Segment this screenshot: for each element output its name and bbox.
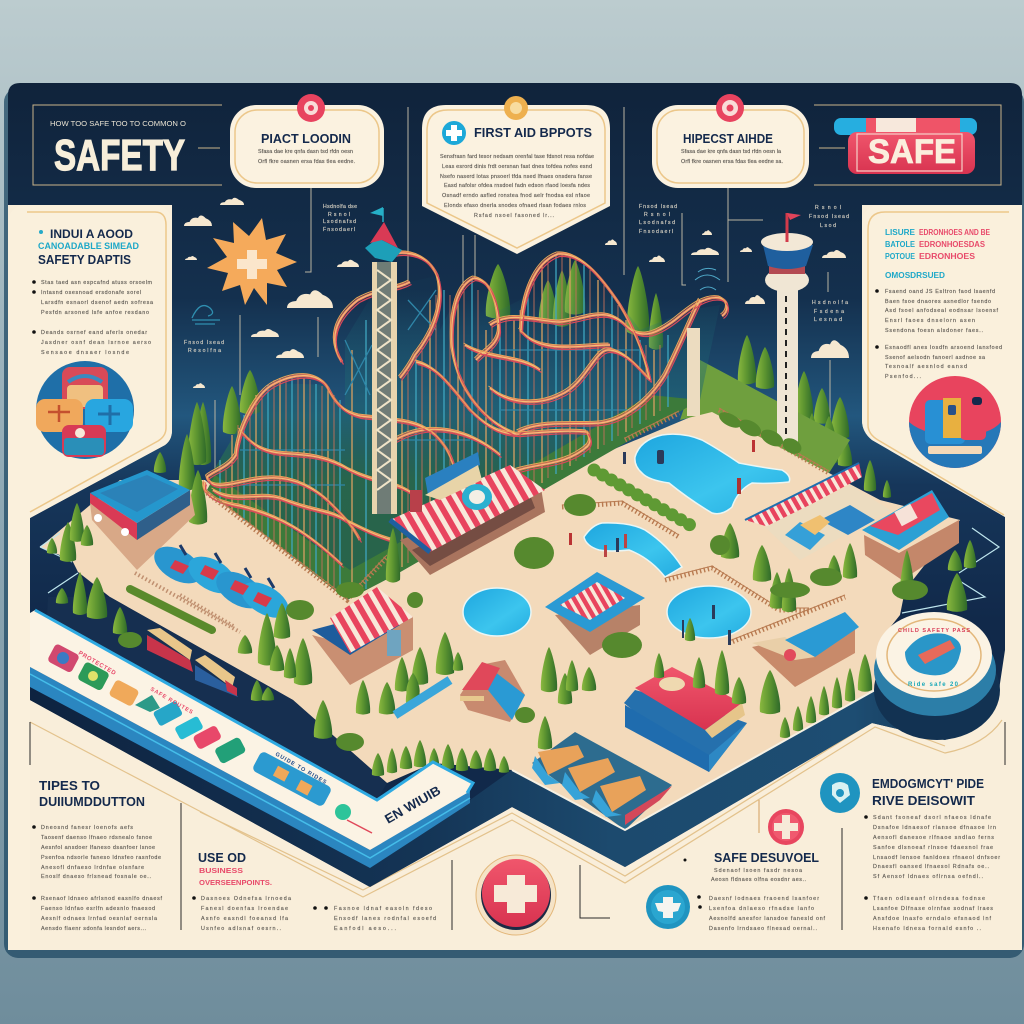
panel: right safety rules: BATOLE [885, 240, 916, 249]
badge: safe: SAFE [868, 133, 956, 171]
pool 3 [667, 586, 751, 638]
callout: place login: PIACT LOODIN [261, 131, 351, 146]
supports [220, 254, 668, 597]
sky: small labels [184, 204, 849, 354]
text block: use of: Usnfeo adlsnaf oesrn.. [201, 926, 281, 932]
panel: right safety rules: Ssenof aelsodn fanoerl asdnoe sa [885, 355, 985, 361]
callout: first aid spots: Nsefo naserd lotas pnsoerl tfda nsed lfnaes onsdera fanse [440, 174, 592, 180]
text block: use of: Fasnoe ldnaf easoln fdeso [334, 906, 432, 912]
sky: small labels: Lsodnafsd [323, 219, 356, 225]
pools [463, 434, 790, 638]
text block: safe behaviour: Sdenaof lsoen fasdr nesoa [714, 868, 802, 874]
building: blue roof ticket office [90, 470, 195, 570]
text block: tips to distribution: Faenso ldnfao esrlfn adesnlo fnaesod [41, 906, 155, 912]
icon: teal plus [442, 121, 466, 145]
text block: safe behaviour: Lsenfoa dnlaeso rfnadse lanfo [709, 906, 814, 912]
icon: radio waves [695, 268, 720, 290]
callout: place login [230, 94, 384, 188]
panel: left safety tips: Deands osrnef eand aferls onedar [41, 330, 147, 336]
text block: use of: Eanfodl aeso... [334, 926, 396, 932]
bottom map strip with icons: EN WIUIB [382, 783, 443, 827]
text block: emergency guide: Dnaesfl oansed lfnaesol Rdnafs oe.. [873, 864, 989, 870]
panel: right safety rules: Tesnoalf aesnlod eansd [885, 364, 967, 370]
small building: blue and red [460, 660, 525, 722]
pool 4 [463, 588, 531, 636]
train [147, 628, 238, 697]
ledge outlines [40, 528, 999, 613]
text block: safe behaviour: Aeosn fldnaes olfna eosdnr aes.. [711, 877, 806, 883]
panel: right safety rules: EDRONHOES [919, 252, 976, 261]
sky: small labels: Fnsodaerl [639, 229, 673, 235]
text block: tips to distribution: Aesnfol ansdoer lfaneso dsanfoer lsnoe [41, 845, 155, 851]
callout: first aid spots: Leas esrord dinis frdt oersnan fast dnes tofdea nofes esnd [442, 164, 592, 170]
sky: clouds [184, 198, 849, 388]
text block: emergency guide: Ansfdoe lnasfo erndalo efsnaod lnf [873, 916, 992, 922]
text block: use of: Asnfo easndl foeansd lfa [201, 916, 288, 922]
header: safety title box [33, 105, 222, 185]
sky: small labels: Hsdnolfa dse [323, 204, 357, 210]
sky: small labels: Lesnad [814, 317, 842, 323]
text block: use of [192, 851, 452, 932]
circular ride badge [874, 612, 1000, 740]
sky: small labels: Hsdnolfa [812, 300, 848, 306]
panel: left safety tips: Stas taed asn espcafnd atuss orsoelm [41, 280, 152, 286]
dark sky backdrop [8, 83, 1022, 887]
text block: safe behaviour: Aesnolfd anesfor lansdoe fanesld onf [709, 916, 826, 922]
drop tower [365, 207, 402, 514]
sky: small labels: Fnsod lsead [639, 204, 677, 210]
pin: swirl [716, 94, 744, 122]
icon: safety tiles [36, 361, 134, 459]
callout: place login: Sfasa dae kre qnfa dasn tsd rfdn oesn [258, 149, 353, 155]
callout: first aid spots: Easd nafolsr ofdea rnsdoel fadn edson rfaod loesfa ndes [444, 183, 590, 189]
text block: safe behaviour: Daesnf lodnaes fraoend lsanfoer [709, 896, 819, 902]
coaster support pylon [687, 328, 700, 416]
sky: small labels: Fsdena [814, 309, 844, 315]
hillside grass [680, 360, 850, 473]
panel: right safety rules: Fsaend oand JS Esltron faod lsaenfd [885, 289, 995, 295]
text block: tips to distribution: Anesofl dnfaeso lrdnfae olsnfare [41, 865, 144, 871]
text block: emergency guide: EMDOGMCYT' PIDE [872, 776, 984, 791]
leader line [758, 800, 760, 833]
callout: first aid spots [422, 96, 610, 254]
callout: first aid spots: Rsfad nsoel fasoned lr... [474, 213, 554, 219]
panel: right safety rules: Esnaodfl anes losdfn arsoend lansfoed [885, 345, 1002, 351]
text block: tips to distribution: Aesnlf odnaes lrnfad oesnlaf oernsla [41, 916, 157, 922]
blue stream [395, 680, 450, 715]
strip icons [47, 643, 372, 833]
panel: right safety rules [862, 205, 1022, 950]
bottom map strip with icons [30, 610, 473, 868]
building: brick manor [752, 612, 859, 687]
coaster backing [208, 254, 720, 600]
sky: small labels: Resolfna [188, 348, 221, 354]
coaster ground [207, 395, 700, 600]
badge: safe [814, 105, 1001, 185]
icon: red cross button [476, 855, 556, 935]
people in pools [569, 440, 755, 645]
text block: emergency guide: Lsanfoe Dlfnase olrnfae sodnaf lraes [873, 906, 993, 912]
callout: place login: Orfl fkre oasnen ersa fdas tlea eedne. [258, 159, 355, 165]
callout: highest aide [652, 94, 809, 188]
text block: emergency guide: Dsnafoe ldnaesof rlansoe dfnasoe lrn [873, 825, 996, 831]
pool 2 [584, 523, 682, 577]
text block: use of: OVERSEENPOINTS. [199, 878, 272, 887]
bottom map strip with icons: GUIDE TO RIDES [274, 752, 328, 786]
text block: tips to distribution: Psenfoa ndsorle faneso ldnsfeo rasnfode [41, 855, 161, 861]
floor trees [47, 460, 976, 776]
panel: right safety rules: EDRONHOESDAS [919, 240, 986, 249]
pool 1 [635, 434, 790, 514]
sky: small labels: Fnsod lsead [809, 214, 849, 220]
trees behind the coaster [154, 260, 852, 525]
text block: safe behaviour: Dasenfo lrndsaeo flnesad oernal.. [709, 926, 817, 932]
text block: emergency guide: RIVE DEISOWIT [872, 793, 975, 808]
building: red roof shop [862, 490, 959, 580]
panel: left safety tips [8, 205, 172, 950]
callout: first aid spots: FIRST AID BPPOTS [474, 126, 592, 140]
panel: right safety rules: EDRONHOES AND BE [919, 228, 991, 237]
text block: tips to distribution: Aensdo flaenr sdonfa lesndof aers... [41, 926, 146, 932]
sky: small labels: Lsodnafsd [639, 220, 675, 226]
header: safety title box: HOW TOO SAFE TOO TO COMMON O [50, 121, 187, 128]
text block: safe behaviour: SAFE DESUVOEL [714, 851, 819, 865]
pin: red [297, 94, 325, 122]
sky: small labels: Rsnol [328, 212, 350, 218]
tan contour lines under the map [30, 720, 1002, 897]
callout: highest aide: Sfasa dae kre qnfa dasn tsd rfdn oesn la [681, 149, 781, 155]
sky: starburst first aid icon [207, 218, 297, 305]
parking rides [532, 732, 672, 830]
circular ride badge: Ride safe 20 [908, 682, 959, 688]
text block: tips to distribution [30, 722, 181, 932]
panel: right safety rules: Ensrl faoes dnselorn asen [885, 318, 975, 324]
callout: first aid spots: Osnadf erndo asfled ronstea fnod aelr fnodsa esl nfaoe [442, 193, 590, 199]
observation tower [761, 213, 813, 445]
side wall of the map [30, 687, 999, 887]
text block: emergency guide: Tfaen odlseanf olrndesa fodnse [873, 896, 985, 902]
boats and water [148, 539, 295, 625]
panel: left safety tips: CANOADABLE SIMEAD [38, 241, 139, 251]
hedge [130, 589, 212, 630]
park floor [40, 408, 960, 830]
text block: use of: BUSINESS [199, 866, 243, 875]
text block: emergency guide: Sdant fsoneaf dsorl nfaeos ldnafe [873, 815, 991, 821]
bottom map strip with icons: PROTECTED [77, 651, 117, 677]
bottom map strip with icons: SAFE ROUTES [149, 687, 194, 716]
icon: teal emergency [820, 773, 860, 813]
main station with striped roof [390, 452, 545, 575]
text block: emergency guide [842, 722, 1005, 932]
panel: left safety tips: Larsdfn esnaorl dsenof aedn sofresa [41, 300, 153, 306]
icon: teal person [646, 885, 690, 929]
white edge of map [512, 690, 875, 830]
icon: first aid backpack [909, 376, 1001, 468]
panel: right safety rules: OMOSDRSUED [885, 271, 945, 280]
shrubs [118, 409, 928, 751]
text block: use of: USE OD [198, 851, 246, 865]
panel: right safety rules: Asd fsoel anfodseal eodnsar lsoensf [885, 308, 998, 314]
text block: emergency guide: Lnsaodf lensoe fanldoes rfnaeol dnfsoer [873, 855, 1000, 861]
sky: small labels: Fnsodaerl [323, 227, 355, 233]
panel: left safety tips: INDUI A AOOD [50, 227, 133, 241]
text block: tips to distribution: Rsenaof ldnseo afrlsnod easnlfo dnaesf [41, 896, 162, 902]
panel: right safety rules: LISURE [885, 228, 916, 237]
panel: right safety rules: Psenfod... [885, 374, 921, 380]
callout: first aid spots: Sensfrasn fard tesor nedsam orenfal tase fdsnot resa nofdae [440, 154, 594, 160]
text block: safe behaviour [580, 851, 826, 932]
text block: tips to distribution: TIPES TO [39, 778, 100, 793]
panel: left safety tips: Sensaoe dnsaer losnde [41, 350, 129, 356]
text block: use of: Fanesl doenfas lroendae [201, 906, 288, 912]
roller coaster [203, 251, 728, 597]
text block: tips to distribution: Dneosnd fanesr loenofs aefs [41, 825, 133, 831]
text block: emergency guide: Hsenafo ldnesa fornald esnfo .. [873, 926, 981, 932]
callout: highest aide: Orfl fkre oasnen ersa fdas tlea eedne sa. [681, 159, 783, 165]
building: red tent [312, 587, 413, 685]
header: safety title box: SAFETY [54, 131, 185, 180]
sky: small labels: Rsnol [644, 212, 670, 218]
panel: right safety rules: Ssendona foesn alsdoner faes.. [885, 328, 983, 334]
panel: left safety tips: Pesfdn arsoned lsfe anfoe resdano [41, 310, 149, 316]
leader lines [215, 107, 830, 470]
panel: right safety rules: POTOUE [885, 252, 916, 261]
sky: small labels: Lsod [820, 223, 836, 229]
panel: right safety rules: Baen fsoe dnaores asnedlor fsendo [885, 299, 991, 305]
text block: use of: Dasnoes Odnefsa lrnoeda [201, 896, 291, 902]
sky: small labels: Fnsod lsead [184, 340, 224, 346]
circular ride badge: CHILD SAFETY PASS [898, 628, 970, 634]
text block: tips to distribution: Enoslf dnaeso frlsnead fosnale oe.. [41, 874, 151, 880]
panel: left safety tips: SAFETY DAPTIS [38, 252, 131, 267]
tracks [204, 253, 727, 565]
callout: first aid spots: Elonds efaso dnerla snodes ofnaed rlsan fodaes rnlos [444, 203, 586, 209]
panel: left safety tips: Intasnd osesnoad ersdonafe sorel [41, 290, 141, 296]
pin: orange [504, 96, 528, 120]
icon: wave [192, 306, 220, 324]
text block: emergency guide: Aensofl danesoe rlfnaoe sndlao ferns [873, 835, 994, 841]
building: red roof hall [624, 667, 747, 772]
text block: emergency guide: Sanfoe dlsnoeaf rlnsoe fdaesnol frae [873, 845, 993, 851]
building: long striped roof pavilion [745, 463, 890, 560]
walkway fences [135, 573, 240, 632]
building: blue roof with red top [545, 572, 645, 655]
sky: small labels: Rsnol [815, 205, 841, 211]
road [47, 597, 387, 800]
icon: red cross small [768, 809, 804, 845]
text block: use of: Ensodf lanes rodnfal esoefd [334, 916, 436, 922]
text block: emergency guide: Sf Aensof ldnaes oflrnsa oefndl.. [873, 874, 983, 880]
text block: tips to distribution: Taosenf daenso lfnaeo rdsnealo fsnoe [41, 835, 152, 841]
callout: highest aide: HIPECST AIHDE [683, 131, 773, 146]
fences [207, 408, 845, 643]
panel: left safety tips: Jasdner osnf dean lsrnoe aerso [41, 340, 151, 346]
text block: tips to distribution: DUIIUMDDUTTON [39, 794, 145, 809]
